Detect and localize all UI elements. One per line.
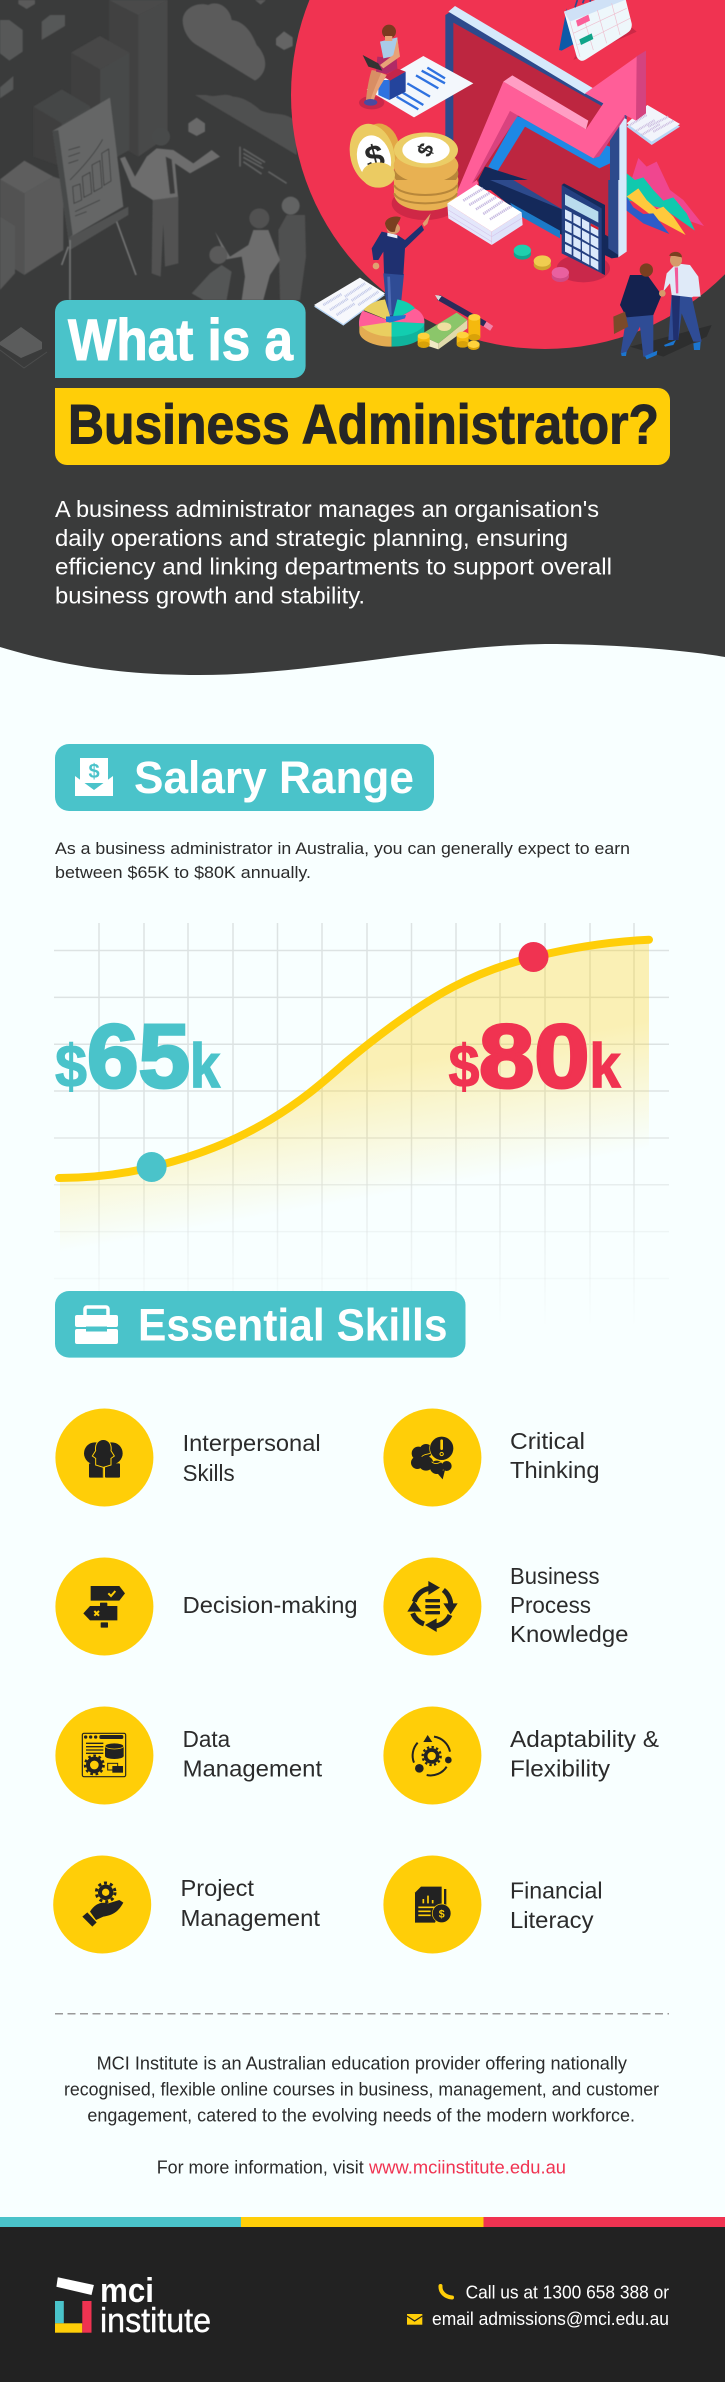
about mci institute text: recognised, flexible online courses in business, management, and customer bbox=[64, 2080, 659, 2100]
icon: two heads bbox=[84, 1439, 123, 1478]
monitor bbox=[445, 6, 627, 190]
value: $65k: 65 bbox=[87, 1007, 190, 1107]
title line 1: What is a bbox=[68, 308, 294, 373]
skill: critical thinking bbox=[383, 1408, 600, 1506]
coloured discs bbox=[514, 245, 569, 282]
logo: mci institute bbox=[55, 2272, 211, 2340]
icon: signpost bbox=[83, 1586, 125, 1628]
coins bbox=[343, 119, 458, 205]
logo: mci institute: mci bbox=[100, 2272, 154, 2310]
contact: phone: Call us at 1300 658 388 or bbox=[466, 2282, 669, 2302]
gold stacks bbox=[418, 314, 480, 350]
hero dark wave background bbox=[0, 0, 725, 675]
skill: data management: Data bbox=[183, 1726, 230, 1752]
intro paragraph: efficiency and linking departments to support overall bbox=[55, 554, 612, 580]
value: $80k: 80 bbox=[479, 1007, 590, 1107]
skill: adaptability: Flexibility bbox=[510, 1756, 611, 1782]
colourful area chart bbox=[627, 158, 704, 235]
icon: envelope with dollar: $ bbox=[88, 761, 100, 783]
panel: footer bbox=[0, 2227, 725, 2382]
illustration: business finance isometric upper (monitor, arrow, coins, woman, calendar) bbox=[343, 0, 680, 205]
value: $80k: $ bbox=[448, 1033, 480, 1100]
value: $80k: k bbox=[590, 1032, 621, 1101]
skill: business process knowledge: Knowledge bbox=[510, 1621, 628, 1647]
pie chart bbox=[359, 299, 424, 347]
skill: business process knowledge: Process bbox=[510, 1592, 591, 1618]
skill: adaptability: Adaptability & bbox=[510, 1726, 659, 1752]
handshake men bbox=[613, 252, 712, 359]
about mci institute text: MCI Institute is an Australian education provider offering nationally bbox=[97, 2054, 627, 2074]
illustration: greyscale office scene bbox=[0, 0, 306, 300]
icon: financial report bbox=[415, 1887, 451, 1923]
monitor base bbox=[457, 180, 627, 258]
bottom-left faded block bbox=[0, 327, 47, 368]
website line bbox=[157, 2158, 566, 2178]
paper stack bbox=[447, 184, 523, 245]
intro paragraph: business growth and stability. bbox=[55, 582, 365, 608]
skill: project management bbox=[53, 1856, 321, 1954]
skill: financial literacy bbox=[383, 1856, 602, 1954]
skill: project management: Project bbox=[180, 1875, 255, 1901]
marker: 65k bbox=[137, 1152, 167, 1182]
intro paragraph: A business administrator manages an organisation's bbox=[55, 496, 599, 522]
skill: business process knowledge: Business bbox=[510, 1563, 600, 1589]
title line 2: Business Administrator? bbox=[68, 392, 659, 456]
website line: www.mciinstitute.edu.au bbox=[368, 2158, 566, 2178]
skill: financial literacy: Financial bbox=[510, 1878, 602, 1904]
skill: financial literacy: Literacy bbox=[510, 1907, 594, 1933]
pointing man bbox=[372, 213, 431, 317]
salary growth chart bbox=[54, 923, 669, 1328]
skill: business process knowledge bbox=[383, 1558, 628, 1656]
woman on cube with document bbox=[359, 25, 473, 117]
coin stack base bbox=[362, 162, 458, 220]
illustration: business finance isometric lower (papers, pie, people, calculator) bbox=[314, 158, 712, 359]
salary description: between $65K to $80K annually. bbox=[55, 863, 311, 882]
presenter flipchart bbox=[53, 98, 136, 300]
heading: essential skills bbox=[55, 1291, 466, 1358]
icon: gear cycle bbox=[413, 1735, 452, 1775]
presenter figure bbox=[120, 128, 220, 277]
about mci institute text: engagement, catered to the evolving needs of the modern workforce. bbox=[87, 2106, 635, 2126]
skill: interpersonal: Interpersonal bbox=[183, 1430, 321, 1456]
skill: data management bbox=[55, 1706, 323, 1804]
icon: toolbox bbox=[75, 1307, 118, 1344]
skill: critical thinking: Thinking bbox=[510, 1457, 600, 1483]
skill: critical thinking: Critical bbox=[510, 1428, 585, 1454]
marker: 80k bbox=[518, 942, 548, 972]
intro paragraph: daily operations and strategic planning, ensuring bbox=[55, 525, 568, 551]
panel: skills grid bbox=[53, 1408, 659, 1954]
panel: hero bbox=[0, 0, 725, 675]
intro paragraph bbox=[55, 496, 612, 608]
icon: envelope with dollar bbox=[75, 758, 113, 796]
coins: $ bbox=[361, 138, 389, 178]
icon: process cycle bbox=[407, 1581, 458, 1632]
icon: hand with gear bbox=[82, 1883, 123, 1927]
logo: mci institute: institute bbox=[100, 2302, 211, 2340]
heading: salary range bbox=[55, 744, 434, 811]
skill: data management: Management bbox=[183, 1756, 323, 1782]
about mci institute text bbox=[64, 2054, 659, 2126]
calendar bbox=[559, 0, 637, 61]
bezel corner bbox=[478, 167, 560, 190]
salary description bbox=[55, 839, 630, 882]
area under curve bbox=[60, 940, 649, 1298]
value: $65k bbox=[55, 1007, 220, 1107]
heading: salary range: Salary Range bbox=[134, 752, 414, 803]
icon: brain with alert bbox=[411, 1436, 454, 1479]
document under pie bbox=[314, 278, 385, 326]
salary curve bbox=[59, 940, 649, 1178]
colour stripe bbox=[0, 2217, 725, 2227]
calculator bbox=[557, 183, 610, 282]
skill: adaptability bbox=[383, 1706, 659, 1804]
salary description: As a business administrator in Australia, you can generally expect to earn bbox=[55, 839, 630, 858]
icon: data dashboard bbox=[82, 1733, 126, 1777]
skill: project management: Management bbox=[180, 1905, 321, 1931]
blue band behind arrow bbox=[488, 116, 610, 172]
skill: interpersonal: Skills bbox=[183, 1460, 235, 1486]
banknotes bbox=[420, 313, 467, 349]
website line: For more information, visit bbox=[157, 2158, 364, 2178]
coins: $ bbox=[412, 139, 439, 160]
heading: essential skills: Essential Skills bbox=[138, 1300, 448, 1350]
value: $65k: k bbox=[190, 1032, 220, 1101]
skill: decision-making bbox=[55, 1558, 358, 1656]
skill: decision-making: Decision-making bbox=[183, 1592, 358, 1618]
icon: financial report: $ bbox=[439, 1908, 445, 1920]
value: $80k bbox=[448, 1007, 621, 1107]
right paper bbox=[627, 105, 680, 145]
pink arrow bbox=[455, 51, 646, 197]
skill: interpersonal bbox=[55, 1408, 321, 1506]
audience figures bbox=[192, 197, 306, 300]
contact: email: email admissions@mci.edu.au bbox=[432, 2309, 669, 2329]
red circle bbox=[291, 0, 725, 349]
value: $65k: $ bbox=[55, 1033, 87, 1100]
pencil bbox=[435, 295, 492, 328]
